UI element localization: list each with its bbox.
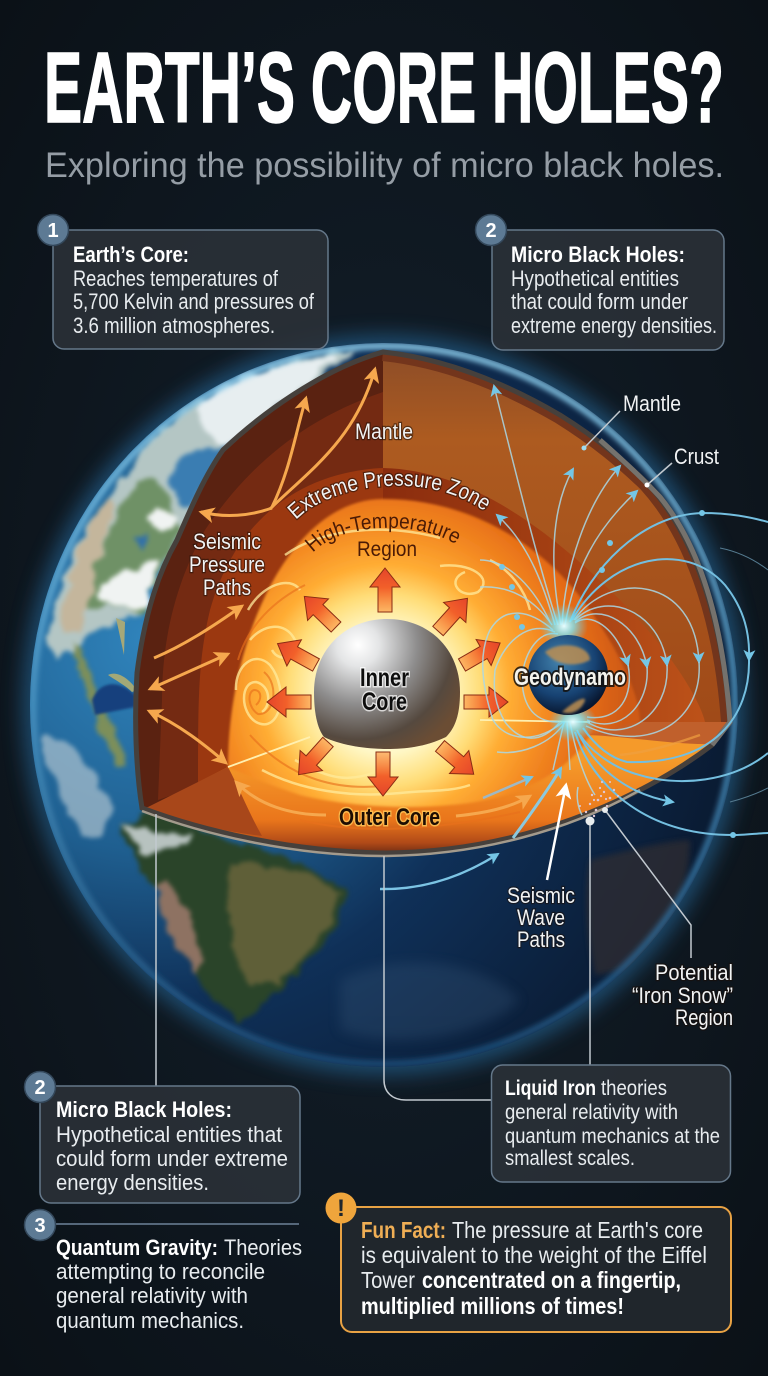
florida bbox=[116, 618, 125, 655]
section 3: quantum gravity bbox=[24, 1210, 302, 1333]
panel 1: earth's core bbox=[38, 214, 328, 349]
label: mantle left: Mantle bbox=[355, 419, 413, 444]
panel 2: micro black holes top bbox=[476, 214, 724, 350]
crust rim lit bottom bbox=[142, 790, 640, 856]
crust rim lit right bbox=[600, 440, 730, 745]
label: seismic wave paths: Paths bbox=[517, 927, 565, 952]
panel 4 text: theories bbox=[601, 1077, 667, 1100]
section 3 text: quantum mechanics. bbox=[56, 1308, 244, 1333]
label: seismic pressure paths: Pressure bbox=[189, 552, 265, 577]
floor crease bbox=[228, 720, 590, 767]
label: potential iron snow region: Region bbox=[675, 1005, 733, 1030]
panel 3 text: could form under extreme bbox=[56, 1146, 288, 1171]
geodynamo bbox=[514, 604, 626, 742]
badge 2 lower bbox=[24, 1072, 56, 1102]
fun fact text bbox=[361, 1217, 707, 1319]
panel 4 text bbox=[505, 1077, 720, 1170]
label: seismic wave paths bbox=[507, 883, 575, 952]
seismic pressure path arrows bbox=[149, 369, 530, 816]
floor of wedge bbox=[147, 734, 709, 850]
badge 1 bbox=[38, 214, 68, 246]
section 3 text: attempting to reconcile bbox=[56, 1259, 265, 1284]
geodynamo label: Geodynamo bbox=[514, 664, 626, 691]
outer core molten dome bbox=[228, 499, 640, 807]
panel 2 text bbox=[511, 242, 717, 338]
mantle: left band bbox=[158, 392, 383, 800]
panel 4 text: quantum mechanics at the bbox=[505, 1125, 720, 1148]
badge 3: 3 bbox=[34, 1215, 46, 1237]
label: outer core: Outer Core bbox=[339, 804, 440, 831]
label: seismic pressure paths: Seismic bbox=[193, 529, 261, 554]
label: seismic wave paths: Seismic bbox=[507, 883, 575, 908]
fun fact text: multiplied millions of times! bbox=[361, 1293, 624, 1319]
panel 1 text bbox=[73, 242, 315, 338]
badge 1: 1 bbox=[47, 220, 59, 242]
panel 1 text: Earth’s Core: bbox=[73, 242, 189, 267]
panel 5: fun fact bbox=[326, 1192, 731, 1332]
iron snow particles bbox=[579, 781, 619, 817]
section 3 text: Quantum Gravity: bbox=[56, 1235, 218, 1260]
inner core bbox=[314, 619, 460, 749]
badge exclamation: ! bbox=[337, 1195, 345, 1222]
panel 4 text: smallest scales. bbox=[505, 1147, 635, 1170]
fun fact text: concentrated on a fingertip, bbox=[422, 1267, 681, 1293]
panel 3: micro black holes bottom bbox=[24, 1072, 300, 1203]
pole glow south bbox=[549, 702, 597, 742]
panel 4 text: Liquid Iron bbox=[505, 1077, 596, 1100]
fun fact text: Tower bbox=[361, 1267, 415, 1293]
badge 3 bbox=[24, 1210, 56, 1240]
panel 4 text: general relativity with bbox=[505, 1101, 678, 1124]
mantle: right face bbox=[383, 361, 721, 722]
mantle: left inner band bbox=[198, 468, 383, 785]
badge 2 bbox=[476, 214, 506, 246]
caribbean bbox=[92, 684, 135, 715]
fun fact text: is equivalent to the weight of the Eiffel bbox=[361, 1242, 707, 1268]
panel 3 text bbox=[56, 1097, 288, 1195]
label: seismic pressure paths: Paths bbox=[203, 575, 251, 600]
panel 1 text: 5,700 Kelvin and pressures of bbox=[73, 289, 315, 314]
label: seismic pressure paths bbox=[189, 529, 265, 600]
extreme pressure zone right bbox=[383, 468, 705, 722]
panel 3 text: Micro Black Holes: bbox=[56, 1097, 232, 1122]
inner core label: Inner bbox=[360, 664, 409, 692]
panel 1 text: 3.6 million atmospheres. bbox=[73, 313, 275, 338]
swirls bbox=[236, 530, 530, 794]
panel 2 text: Micro Black Holes: bbox=[511, 242, 685, 267]
section 3 text: Theories bbox=[224, 1235, 302, 1260]
leader lines bbox=[156, 411, 691, 1100]
magnetic field lines bbox=[480, 386, 768, 838]
floor right facet bbox=[590, 722, 728, 744]
badge 2 lower: 2 bbox=[34, 1077, 46, 1099]
label: extreme pressure zone: Extreme Pressure Zone bbox=[286, 471, 490, 520]
label: high temperature region: Region bbox=[357, 538, 417, 561]
panel 1 text: Reaches temperatures of bbox=[73, 266, 279, 291]
badge 2: 2 bbox=[485, 220, 497, 242]
seismic arrows blue and white bbox=[380, 768, 566, 889]
land: africa in shadow bbox=[587, 840, 690, 975]
fun fact text: Fun Fact: bbox=[361, 1217, 446, 1243]
section 3 text bbox=[56, 1235, 302, 1333]
fun fact text: The pressure at Earth's core bbox=[452, 1217, 703, 1243]
crust band right bbox=[383, 352, 730, 722]
inner core label bbox=[360, 664, 409, 716]
faint clouds bbox=[340, 963, 520, 1040]
section panel: cutaway of the earth bbox=[136, 345, 745, 856]
label: potential iron snow region bbox=[632, 960, 733, 1030]
pole glow north bbox=[540, 604, 588, 648]
cuba bbox=[108, 674, 137, 692]
label: mantle right: Mantle bbox=[623, 391, 681, 416]
land: north america bbox=[40, 350, 360, 838]
atmosphere rim bbox=[33, 346, 735, 1064]
label: potential iron snow region: “Iron Snow” bbox=[632, 983, 733, 1008]
label: potential iron snow region: Potential bbox=[655, 960, 733, 985]
land: south america bbox=[121, 812, 344, 1023]
subtitle: Exploring the possibility of micro black holes. bbox=[45, 146, 724, 185]
radial pressure arrows bbox=[267, 568, 508, 796]
panel 2 text: extreme energy densities. bbox=[511, 313, 717, 338]
label: crust: Crust bbox=[674, 444, 719, 469]
label: high temperature region: High-Temperature bbox=[304, 516, 460, 552]
panel 4: liquid iron bbox=[492, 1065, 730, 1182]
label: seismic wave paths: Wave bbox=[517, 905, 565, 930]
earth globe bbox=[22, 335, 746, 1075]
section 3 text: general relativity with bbox=[56, 1283, 248, 1308]
floor left facet bbox=[146, 767, 262, 836]
crust rim bbox=[136, 352, 730, 853]
panel 3 text: energy densities. bbox=[56, 1170, 209, 1195]
panel 2 text: that could form under bbox=[511, 289, 688, 314]
inner core label: Core bbox=[362, 688, 407, 716]
badge exclamation bbox=[326, 1192, 356, 1224]
panel 2 text: Hypothetical entities bbox=[511, 266, 679, 291]
panel 3 text: Hypothetical entities that bbox=[56, 1122, 282, 1147]
